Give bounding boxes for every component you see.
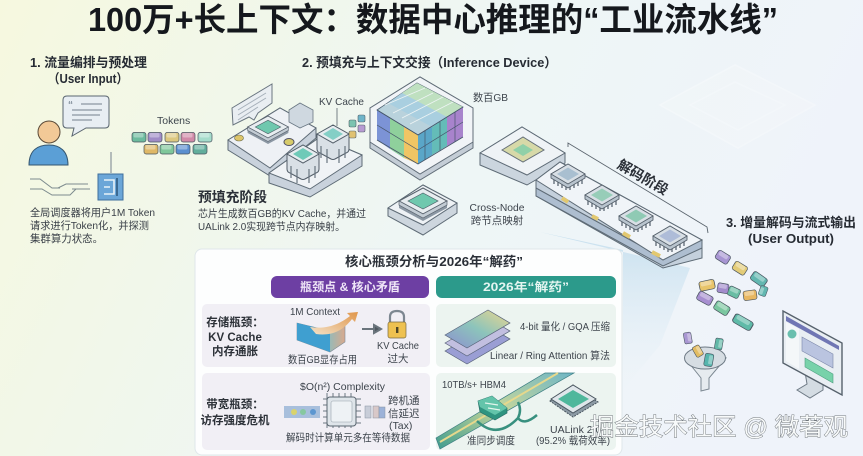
heading: section 3 bbox=[726, 215, 856, 246]
label: KV cache too large: KV Cache bbox=[377, 340, 419, 352]
section 1: user input bbox=[29, 55, 212, 245]
icon: speech bubble bbox=[63, 96, 109, 136]
label: cross-node: Cross-Node bbox=[470, 202, 525, 214]
circuit lines bbox=[30, 179, 90, 195]
cross-node platform bbox=[388, 185, 457, 235]
prefill platforms bbox=[228, 103, 362, 197]
label: storage bottleneck: KV Cache bbox=[208, 332, 262, 344]
label: KV cache too large: 过大 bbox=[388, 352, 409, 365]
token stream bbox=[696, 249, 768, 331]
label: UALink: (95.2% 载荷效率) bbox=[536, 434, 610, 447]
icon: lock bbox=[388, 311, 406, 338]
row: compression remedy bbox=[436, 304, 616, 367]
prefill stage text bbox=[198, 189, 366, 233]
icon: processor bbox=[323, 393, 361, 428]
panel title: 核心瓶颈分析与2026年“解药” bbox=[345, 254, 523, 269]
data input band bbox=[284, 406, 320, 418]
icon: network switch bbox=[478, 396, 507, 420]
row: bandwidth bottleneck bbox=[200, 373, 430, 450]
text: scheduler description: 请求进行Token化，并探测 bbox=[30, 219, 149, 232]
label: cross-node bbox=[470, 202, 525, 227]
section 2: inference device bbox=[198, 55, 708, 268]
label: storage bottleneck bbox=[206, 315, 264, 358]
label: HBM4: 10TB/s+ HBM4 bbox=[442, 379, 506, 391]
icon: prefill chat bubble bbox=[232, 84, 272, 125]
memory: blue stripe bbox=[377, 110, 390, 149]
heading: section 1: 1. 流量编排与预处理 bbox=[30, 55, 147, 70]
header: bottleneck bbox=[271, 276, 429, 298]
big memory server bbox=[370, 77, 473, 180]
text: scheduler description: 集群算力状态。 bbox=[30, 232, 103, 245]
label: latency tax: 信延迟 bbox=[388, 407, 420, 420]
label: UALink: UALink 2.0 bbox=[550, 424, 602, 436]
label: bandwidth bottleneck bbox=[200, 397, 270, 427]
output blocks bbox=[365, 406, 385, 418]
icon: UALink chip bbox=[550, 385, 598, 417]
label: 1M context: 1M Context bbox=[290, 306, 340, 318]
heading: section 1 bbox=[30, 55, 147, 86]
heading: section 1: （User Input） bbox=[48, 71, 128, 86]
label: KV Cache: KV Cache bbox=[319, 96, 364, 108]
background: faint chip decoration bbox=[660, 65, 815, 148]
icon: scheduler bbox=[98, 174, 123, 200]
header: remedy: 2026年“解药” bbox=[483, 279, 569, 294]
title: 100万+长上下文：数据中心推理的“工业流水线” bbox=[88, 1, 778, 38]
row: interconnect remedy bbox=[436, 373, 616, 450]
icon: funnel bbox=[683, 332, 726, 391]
label: latency tax: (Tax) bbox=[389, 420, 412, 432]
prefill stage text: 预填充阶段 bbox=[198, 189, 267, 205]
label: hundreds of GB: 数百GB bbox=[473, 91, 508, 104]
prefill stage text: UALink 2.0实现跨节点内存映射。 bbox=[198, 220, 345, 233]
label: decode stage: 解码阶段 bbox=[615, 156, 671, 198]
decode stage rack bbox=[536, 162, 702, 268]
label: attention algorithms: Linear / Ring Attention 算法 bbox=[490, 349, 610, 362]
watermark: 掘金技术社区 @ 微著观 bbox=[590, 414, 848, 441]
panel: core bottleneck analysis bbox=[195, 249, 622, 455]
handoff platform with chip bbox=[480, 127, 565, 185]
text: scheduler description: 全局调度器将用户1M Token bbox=[30, 206, 155, 219]
label: latency tax: 跨机通 bbox=[388, 394, 420, 407]
icon: speech bubble: “ bbox=[68, 100, 73, 111]
label: latency tax bbox=[388, 394, 420, 432]
label: VRAM use: 数百GB显存占用 bbox=[288, 353, 357, 366]
label: quantization: 4-bit 量化 / GQA 压缩 bbox=[520, 320, 610, 333]
header: bottleneck: 瓶颈点 & 核心矛盾 bbox=[300, 279, 400, 294]
heading: section 3: (User Output) bbox=[748, 231, 834, 246]
arrow: gray bbox=[362, 325, 381, 333]
heading: section 2: 2. 预填充与上下文交接（Inference Device） bbox=[302, 55, 557, 70]
prefill chips bbox=[248, 116, 349, 183]
arrow: up to user bbox=[110, 152, 112, 173]
icon: monitor bbox=[783, 311, 842, 398]
label: complexity: $O(n²) Complexity bbox=[300, 381, 386, 393]
HBM band bbox=[436, 373, 574, 449]
label: storage bottleneck: 存储瓶颈： bbox=[206, 315, 264, 329]
label: bandwidth bottleneck: 访存强度危机 bbox=[200, 413, 270, 427]
icon: stacked layers bbox=[445, 310, 510, 364]
label: waiting for data: 解码时计算单元多在等待数据 bbox=[286, 431, 410, 444]
label: UALink bbox=[536, 424, 610, 447]
memory: right face stripes bbox=[418, 127, 432, 164]
heading: section 3: 3. 增量解码与流式输出 bbox=[726, 215, 856, 230]
prefill stage text: 芯片生成数百GB的KV Cache，并通过 bbox=[198, 207, 366, 220]
icon: overflowing box bbox=[297, 312, 358, 352]
bracket: decode stage bbox=[568, 143, 708, 233]
background: blue swoosh bbox=[540, 232, 690, 390]
label: bandwidth bottleneck: 带宽瓶颈： bbox=[206, 397, 264, 411]
label: KV cache too large bbox=[377, 340, 419, 365]
section 3: user output bbox=[683, 215, 856, 398]
header: remedy bbox=[436, 276, 616, 298]
label: tokens: Tokens bbox=[157, 115, 190, 127]
text: scheduler description bbox=[30, 206, 155, 245]
small KV blocks bbox=[349, 115, 365, 138]
icon: user bbox=[29, 121, 68, 165]
label: storage bottleneck: 内存通胀 bbox=[212, 344, 258, 358]
memory: yellow stripe bbox=[404, 127, 418, 164]
label: cross-node: 跨节点映射 bbox=[471, 214, 524, 227]
memory: green stripe bbox=[390, 118, 404, 158]
label: sync scheduling: 准同步调度 bbox=[467, 434, 515, 447]
row: storage bottleneck bbox=[202, 304, 430, 367]
arrow: synchronous scheduling bbox=[477, 402, 537, 430]
token blocks bbox=[132, 132, 212, 154]
